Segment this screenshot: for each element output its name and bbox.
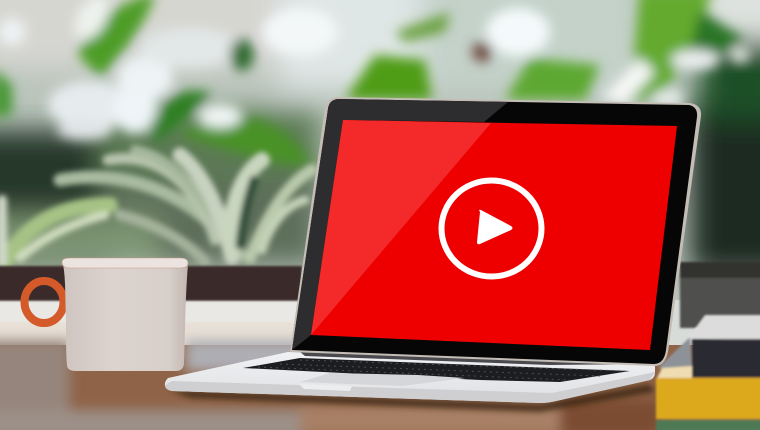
top book (688, 315, 760, 340)
mug body (63, 264, 188, 371)
right dark box behind laptop (680, 262, 760, 328)
laptop base (165, 352, 655, 403)
black book (692, 339, 760, 377)
grey book wedge (658, 337, 692, 372)
cream page edge (657, 366, 692, 378)
red screen (311, 120, 677, 350)
mug handle (24, 281, 64, 323)
screen reflection (311, 120, 491, 335)
laptop shadow (170, 384, 655, 412)
laptop lid (290, 97, 701, 366)
white ledge (0, 301, 300, 347)
wooden table (0, 340, 760, 430)
play triangle (477, 210, 512, 244)
soil planter band (0, 266, 302, 302)
yellow book (656, 378, 760, 419)
trackpad (300, 373, 465, 386)
keyboard (243, 358, 630, 382)
play button ring (442, 180, 542, 276)
stack of books (656, 315, 760, 430)
background: blurred foliage (0, 0, 760, 300)
green book (656, 420, 760, 430)
laptop hinge (300, 352, 649, 365)
mug rim (62, 258, 188, 268)
laptop (165, 97, 701, 412)
coffee mug (24, 258, 188, 371)
bezel reflection (292, 99, 508, 350)
trackpad notch (299, 384, 352, 391)
